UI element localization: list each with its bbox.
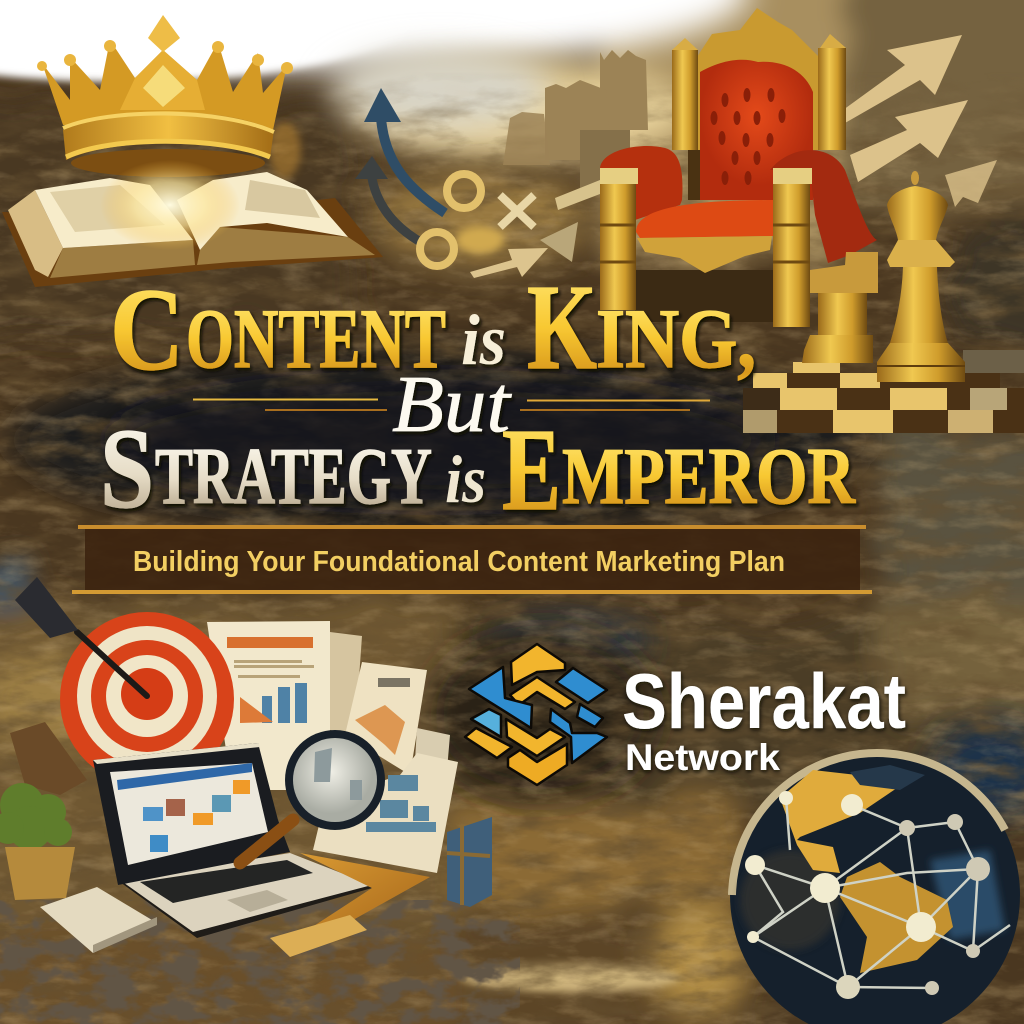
icon: blue cross book [447, 817, 492, 907]
subtitle: Building Your Foundational Content Marketing Plan [133, 546, 785, 578]
icon: network globe [730, 750, 1020, 1024]
title line 1: C [110, 264, 184, 395]
logo wordmark: Network [625, 737, 780, 778]
subtitle banner [72, 525, 872, 594]
desk surface [270, 853, 430, 957]
icon: plant in pot [0, 783, 75, 900]
title: is [461, 300, 506, 380]
documents with charts [207, 621, 458, 873]
title: ING, [596, 292, 756, 386]
icon: chess board [743, 350, 1024, 433]
wooden frames behind plant [10, 722, 87, 795]
logo wordmark [622, 657, 906, 778]
connector word: But [392, 361, 512, 449]
icon: chess rook [802, 252, 878, 363]
icon: laptop [93, 743, 372, 938]
logo mark [465, 644, 607, 785]
icon: magnifying glass [240, 730, 385, 863]
title: is [445, 441, 486, 517]
icon: crown [37, 15, 301, 178]
icon: chess queen [877, 171, 965, 382]
decorative rules beside But [193, 400, 710, 410]
growth arrows, top right [843, 35, 997, 207]
title: MPEROR [562, 431, 856, 521]
title: ONTENT [186, 292, 446, 386]
title: E [502, 404, 561, 535]
title: K [527, 260, 597, 395]
title [100, 260, 856, 535]
castle silhouette [503, 50, 648, 190]
strategy diagram [355, 88, 600, 278]
title: TRATEGY [155, 431, 432, 521]
desk notebook [40, 887, 157, 953]
icon: open book [2, 160, 383, 287]
icon: target with arrow [15, 577, 234, 786]
title line 2: S [100, 405, 154, 532]
icon: throne [600, 8, 877, 327]
logo wordmark: Sherakat [622, 657, 906, 745]
